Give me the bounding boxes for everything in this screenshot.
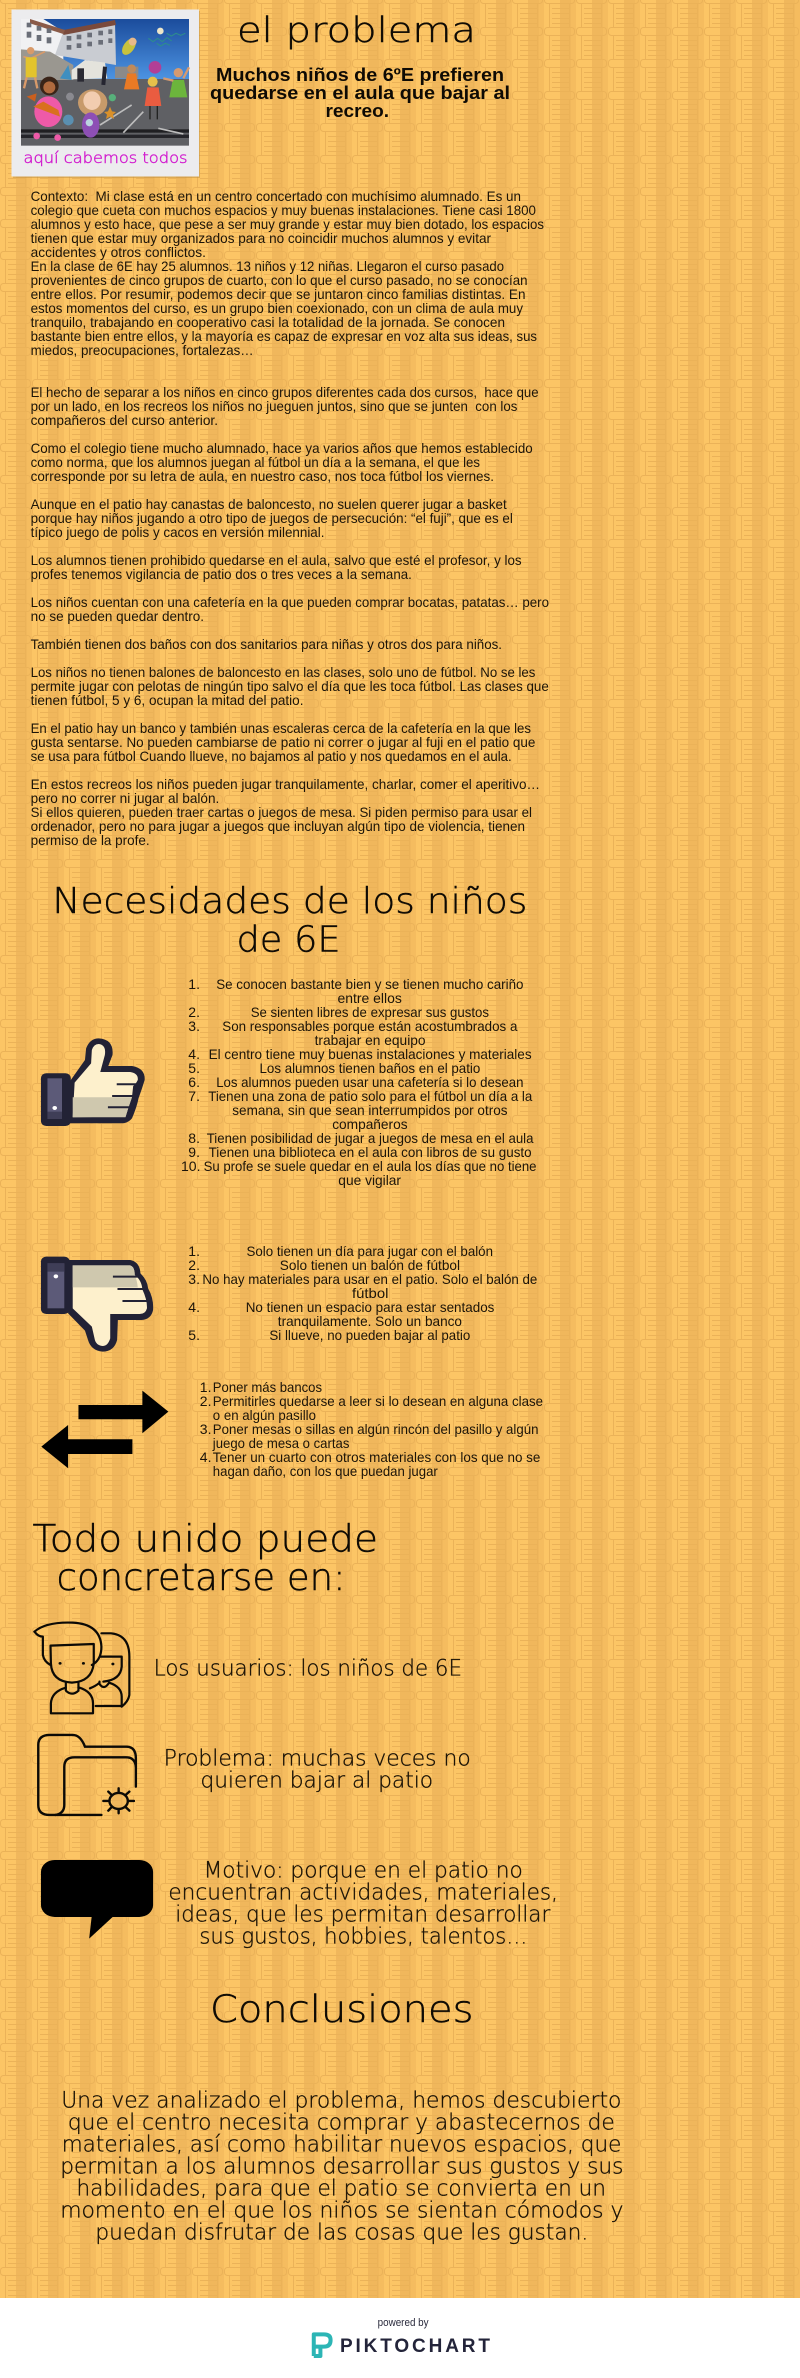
- list: propuestas: Poner más bancos: [213, 1379, 322, 1395]
- text block: contexto: colegio que cueta con muchos espacios y muy buenas instalaciones. Tiene casi 1800: [31, 202, 536, 218]
- text: motivo: sus gustos, hobbies, talentos…: [199, 1924, 527, 1950]
- list: aspectos positivos: trabajar en equipo: [315, 1032, 426, 1048]
- list: aspectos positivos: Su profe se suele quedar en el aula los días que no tiene: [204, 1158, 537, 1174]
- list: aspectos negativos: No hay materiales para usar en el patio. Solo el balón de: [202, 1271, 537, 1287]
- text: motivo: Motivo: porque en el patio no: [204, 1858, 523, 1884]
- list: aspectos positivos: [181, 976, 537, 1188]
- list: aspectos positivos: Son responsables porque están acostumbrados a: [222, 1018, 518, 1034]
- list: aspectos positivos: Tienen una zona de patio solo para el fútbol un día a la: [208, 1088, 532, 1104]
- footer: powered by piktochart: PIKTOCHART: [340, 2336, 490, 2357]
- text block: descripción del recreo: En el patio hay un banco y también unas escaleras cerca de la cafetería en la que les: [31, 720, 531, 736]
- text block: descripción del recreo: ordenador, pero no para jugar a juegos que incluyan algún tipo de violencia, tienen: [31, 818, 525, 834]
- text block: contexto: alumnos y esto hace, que pese a ser muy grande y estar muy bien dotado, los espacios: [31, 216, 544, 232]
- text block: descripción del recreo: profes tenemos vigilancia de patio dos o tres veces a la semana.: [31, 566, 412, 582]
- photo: aquí cabemos todos: aquí cabemos todos: [24, 149, 188, 167]
- list: aspectos negativos: fútbol: [352, 1285, 388, 1301]
- text: conclusiones: [60, 2088, 623, 2246]
- text block: contexto: accidentes y otros conflictos.: [31, 244, 206, 260]
- list: aspectos negativos: Solo tienen un día para jugar con el balón: [246, 1243, 493, 1259]
- list: aspectos negativos: 3.: [188, 1271, 200, 1287]
- icon: thumbs down: [41, 1257, 153, 1352]
- subtitle: recreo.: [326, 100, 389, 121]
- text block: descripción del recreo: como norma, que los alumnos juegan al fútbol un día a la semana, el que les: [31, 454, 480, 470]
- text: conclusiones: Una vez analizado el problema, hemos descubierto: [61, 2088, 621, 2114]
- text block: descripción del recreo: Como el colegio tiene mucho alumnado, hace ya varios años que hemos establecido: [31, 440, 533, 456]
- list: aspectos positivos: 2.: [188, 1004, 200, 1020]
- list: propuestas: Tener un cuarto con otros materiales con los que no se: [213, 1449, 541, 1465]
- text block: descripción del recreo: porque hay niños jugando a otro tipo de juegos de persecución: “el fuji”, que es el: [31, 510, 513, 526]
- list: propuestas: [200, 1379, 543, 1479]
- title: el problema: el problema: [237, 11, 476, 51]
- list: propuestas: 3.: [200, 1421, 211, 1437]
- text block: contexto: provenientes de cinco grupos de cuarto, con lo que el curso pasado, no se conocían: [31, 272, 527, 288]
- icon: users: [34, 1623, 129, 1713]
- text block: descripción del recreo: gusta sentarse. No pueden cambiarse de patio ni correr o jugar al fuji en el patio que: [31, 734, 536, 750]
- list: aspectos positivos: Se sienten libres de expresar sus gustos: [251, 1004, 489, 1020]
- text: conclusiones: momento en el que los niños se sientan cómodos y: [60, 2198, 623, 2224]
- text block: contexto: miedos, preocupaciones, fortalezas…: [31, 342, 254, 358]
- heading: todo unido: Todo unido puede: [32, 1518, 378, 1560]
- list: propuestas: 4.: [200, 1449, 211, 1465]
- list: aspectos positivos: 9.: [188, 1144, 200, 1160]
- text: conclusiones: materiales, así como habilitar nuevos espacios, que: [62, 2132, 621, 2158]
- subtitle: Muchos niños de 6ºE prefieren: [216, 64, 504, 85]
- text: usuarios: Los usuarios: los niños de 6E: [154, 1656, 462, 1682]
- list: aspectos positivos: 10.: [181, 1158, 200, 1174]
- text block: descripción del recreo: permite jugar con pelotas de ningún tipo salvo el día que les toca fútbol. Las clases que: [31, 678, 549, 694]
- text block: descripción del recreo: [31, 384, 549, 848]
- text block: descripción del recreo: por un lado, en los recreos los niños no jueguen juntos, sino que se junten con los: [31, 398, 517, 414]
- text block: contexto: bastante bien entre ellos, y la mayoría es capaz de expresar en voz alta sus ideas, sus: [31, 328, 537, 344]
- list: aspectos positivos: Los alumnos pueden usar una cafetería si lo desean: [216, 1074, 523, 1090]
- text block: descripción del recreo: Los niños no tienen balones de baloncesto en las clases, solo uno de fútbol. No se les: [31, 664, 535, 680]
- text block: descripción del recreo: compañeros del curso anterior.: [31, 412, 218, 428]
- text block: descripción del recreo: Si ellos quieren, pueden traer cartas o juegos de mesa. Si piden permiso para usar el: [31, 804, 532, 820]
- subtitle: [210, 64, 510, 121]
- heading: necesidades: Necesidades de los niños: [52, 881, 527, 922]
- heading: necesidades: de 6E: [236, 920, 340, 960]
- photo: aquí cabemos todos: [12, 10, 200, 178]
- text block: descripción del recreo: Aunque en el patio hay canastas de baloncesto, no suelen querer jugar a basket: [31, 496, 507, 512]
- list: aspectos positivos: 6.: [188, 1074, 200, 1090]
- heading: conclusiones: Conclusiones: [210, 1988, 474, 2031]
- list: aspectos negativos: 1.: [188, 1243, 200, 1259]
- list: aspectos positivos: 4.: [188, 1046, 200, 1062]
- text: conclusiones: que el centro necesita comprar y abastecernos de: [68, 2110, 615, 2136]
- icon: speech bubble: [41, 1860, 153, 1939]
- list: aspectos negativos: [188, 1243, 537, 1343]
- list: aspectos positivos: Los alumnos tienen baños en el patio: [260, 1060, 480, 1076]
- heading: necesidades: [52, 881, 527, 960]
- text block: descripción del recreo: Los niños cuentan con una cafetería en la que pueden comprar bocatas, patatas… pero: [31, 594, 549, 610]
- list: aspectos negativos: No tienen un espacio para estar sentados: [246, 1299, 494, 1315]
- list: aspectos positivos: El centro tiene muy buenas instalaciones y materiales: [209, 1046, 532, 1062]
- list: propuestas: 2.: [200, 1393, 211, 1409]
- list: aspectos positivos: Se conocen bastante bien y se tienen mucho cariño: [216, 976, 524, 992]
- text: conclusiones: permitan a los alumnos desarrollar sus gustos y sus: [60, 2154, 623, 2180]
- text: motivo: ideas, que les permitan desarrollar: [175, 1902, 551, 1928]
- text block: contexto: entre ellos. Por resumir, podemos decir que se juntaron cinco familias distintas. En: [31, 286, 525, 302]
- text block: descripción del recreo: Los alumnos tienen prohibido quedarse en el aula, salvo que esté el profesor, y los: [31, 552, 522, 568]
- text: motivo: [168, 1858, 558, 1950]
- list: propuestas: 1.: [200, 1379, 211, 1395]
- text block: descripción del recreo: tienen fútbol, 5 y 6, ocupan la mitad del patio.: [31, 692, 303, 708]
- list: aspectos negativos: 2.: [188, 1257, 200, 1273]
- text: conclusiones: puedan disfrutar de las cosas que les gustan.: [95, 2220, 588, 2246]
- text block: contexto: estos momentos del curso, es un grupo bien coexionado, con un clima de aula muy: [31, 300, 523, 316]
- list: aspectos positivos: compañeros: [332, 1116, 408, 1132]
- text block: descripción del recreo: En estos recreos los niños pueden jugar tranquilamente, charlar, comer el aperitivo…: [31, 776, 540, 792]
- list: aspectos positivos: entre ellos: [338, 990, 402, 1006]
- footer: powered by piktochart: [0, 2298, 800, 2378]
- text block: descripción del recreo: El hecho de separar a los niños en cinco grupos diferentes cada dos cursos, hace que: [31, 384, 539, 400]
- list: propuestas: o en algún pasillo: [213, 1407, 316, 1423]
- text block: descripción del recreo: pero no correr ni jugar al balón.: [31, 790, 219, 806]
- list: propuestas: Poner mesas o sillas en algún rincón del pasillo y algún: [213, 1421, 539, 1437]
- text: problema: quieren bajar al patio: [200, 1768, 433, 1794]
- icon: folder with gear: [38, 1735, 136, 1815]
- list: aspectos negativos: tranquilamente. Solo un banco: [278, 1313, 462, 1329]
- text block: descripción del recreo: típico juego de polis y cacos en versión milennial.: [31, 524, 324, 540]
- text block: contexto: tranquilo, trabajando en cooperativo casi la totalidad de la jornada. Se conocen: [31, 314, 505, 330]
- text: motivo: encuentran actividades, materiales,: [168, 1880, 558, 1906]
- text block: contexto: tienen que estar muy organizados para no coincidir muchos alumnos y evitar: [31, 230, 491, 246]
- text block: descripción del recreo: También tienen dos baños con dos sanitarios para niñas y otros dos para niños.: [31, 636, 502, 652]
- text block: contexto: Contexto: Mi clase está en un centro concertado con muchísimo alumnado. Es un: [31, 188, 521, 204]
- list: aspectos positivos: que vigilar: [338, 1172, 401, 1188]
- list: aspectos positivos: Tienen posibilidad de jugar a juegos de mesa en el aula: [207, 1130, 534, 1146]
- text block: contexto: [31, 188, 544, 358]
- list: aspectos positivos: 3.: [188, 1018, 200, 1034]
- text block: contexto: En la clase de 6E hay 25 alumnos. 13 niños y 12 niñas. Llegaron el curso pasado: [31, 258, 504, 274]
- list: aspectos negativos: Solo tienen un balón de fútbol: [280, 1257, 460, 1273]
- text block: descripción del recreo: no se pueden quedar dentro.: [31, 608, 204, 624]
- list: aspectos positivos: 5.: [188, 1060, 200, 1076]
- text: problema: [164, 1746, 471, 1794]
- logo mark: [314, 2334, 331, 2356]
- text block: descripción del recreo: permiso de la profe.: [31, 832, 150, 848]
- list: aspectos negativos: 5.: [188, 1327, 200, 1343]
- icon: exchange arrows: [41, 1391, 168, 1468]
- footer: powered by piktochart: powered by: [378, 2317, 429, 2329]
- list: aspectos positivos: 8.: [188, 1130, 200, 1146]
- list: aspectos negativos: Si llueve, no pueden bajar al patio: [269, 1327, 470, 1343]
- text: problema: Problema: muchas veces no: [164, 1746, 471, 1772]
- heading: todo unido: concretarse en:: [57, 1556, 346, 1599]
- subtitle: quedarse en el aula que bajar al: [210, 82, 510, 103]
- text block: descripción del recreo: se usa para fútbol Cuando llueve, no bajamos al patio y nos quedamos en el aula.: [31, 748, 512, 764]
- list: aspectos positivos: Tienen una biblioteca en el aula con libros de su gusto: [209, 1144, 532, 1160]
- list: propuestas: Permitirles quedarse a leer si lo desean en alguna clase: [213, 1393, 543, 1409]
- list: aspectos positivos: 1.: [188, 976, 200, 992]
- list: aspectos positivos: 7.: [188, 1088, 200, 1104]
- list: propuestas: juego de mesa o cartas: [212, 1435, 349, 1451]
- text: conclusiones: habilidades, para que el patio se convierta en un: [76, 2176, 606, 2202]
- text block: descripción del recreo: corresponde por su letra de aula, en nuestro caso, nos toca fútbol los viernes.: [31, 468, 494, 484]
- icon: thumbs up: [41, 1038, 145, 1126]
- list: aspectos negativos: 4.: [188, 1299, 200, 1315]
- list: propuestas: hagan daño, con los que puedan jugar: [213, 1463, 438, 1479]
- list: aspectos positivos: semana, sin que sean interrumpidos por otros: [232, 1102, 508, 1118]
- heading: todo unido: [32, 1518, 378, 1599]
